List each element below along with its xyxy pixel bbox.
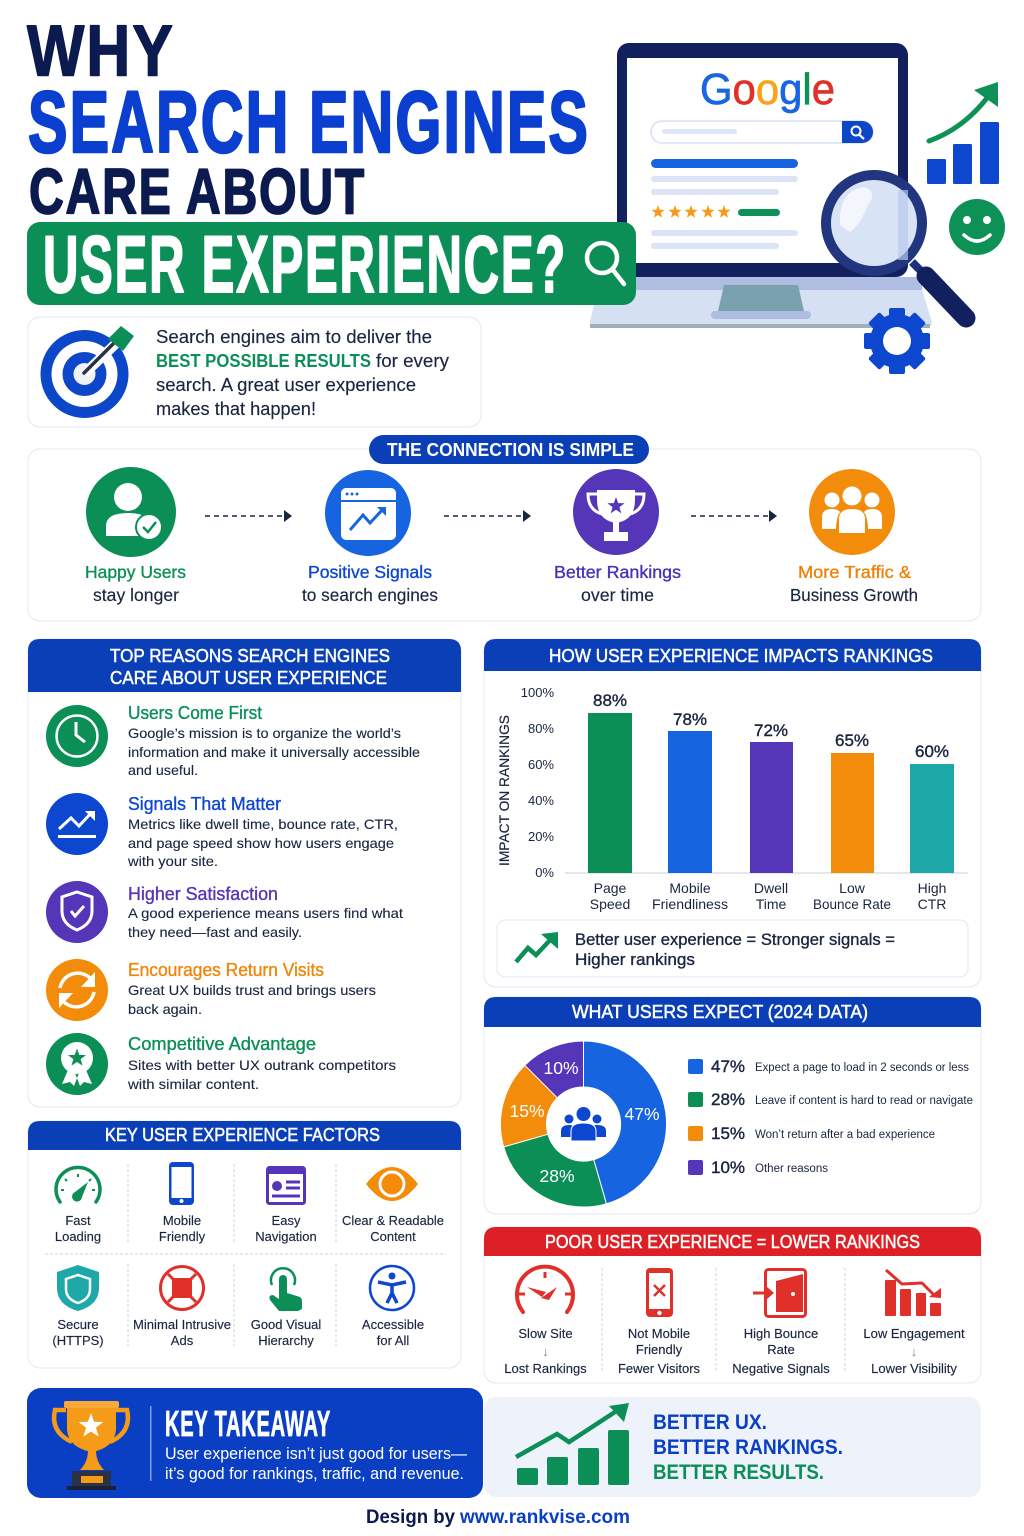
intro panel [28,317,481,427]
item: low engagement [863,1270,965,1376]
legend: Leave if content is hard to read or navigate [755,1095,973,1107]
panel header: KEY USER EXPERIENCE FACTORS [105,1125,380,1145]
legend: 28% [711,1090,745,1109]
legend: 47% [711,1057,745,1076]
smiley [949,199,1005,255]
factor: mobile friendly: Mobile [163,1213,201,1228]
reason: competitive advantage: Competitive Advantage [128,1034,316,1054]
item: not mobile friendly: Friendly [636,1342,683,1357]
item: high bounce rate [732,1270,830,1376]
bar chart: 78% [673,710,707,729]
factor: easy navigation [255,1167,317,1244]
icon: trophy [54,1401,128,1490]
panel header: TOP REASONS SEARCH ENGINES [110,646,390,666]
item: low engagement: ↓ [911,1344,917,1359]
legend: Won’t return after a bad experience [755,1129,935,1141]
arrow [205,510,292,522]
step: better rankings: Better Rankings [554,562,681,582]
donut chart [500,1041,667,1207]
factor: clear content: Clear & Readable [342,1213,444,1228]
takeaway text: it’s good for rankings, traffic, and revenue. [165,1464,464,1483]
takeaway text: User experience isn’t just good for users— [165,1444,467,1463]
bar chart: 100% [521,685,554,700]
legend: 15% [711,1124,745,1143]
pill heading: THE CONNECTION IS SIMPLE [387,440,634,460]
title [27,12,636,310]
item: not mobile friendly: Fewer Visitors [618,1361,701,1376]
title line: search engines: SEARCH ENGINES [28,74,590,171]
step: more traffic: Business Growth [790,585,918,605]
donut chart: 15% [509,1101,545,1121]
reason: return visits: Great UX builds trust and brings users [128,982,376,998]
intro text: Search engines aim to deliver the [156,326,432,347]
reason: return visits: back again. [128,1001,202,1017]
bar chart: 60% [915,742,949,761]
step: better rankings [554,469,681,605]
panel: poor user experience [484,1227,981,1383]
footer credit: Design by [366,1507,455,1528]
factor: fast loading: Fast [65,1213,91,1228]
step: more traffic: More Traffic & [798,562,911,582]
reason: users come first: and useful. [128,762,198,778]
panel header: CARE ABOUT USER EXPERIENCE [110,668,387,688]
panel header [484,639,981,671]
reason: competitive advantage: with similar content. [127,1076,259,1092]
gear [864,308,930,374]
reason: users come first [46,703,420,778]
factor: minimal ads: Ads [171,1333,194,1348]
legend: 10% [711,1158,745,1177]
panel: better results [484,1397,981,1497]
item: high bounce rate: Negative Signals [732,1361,830,1376]
callout [497,920,968,977]
legend: Other reasons [755,1163,828,1175]
item: not mobile friendly [618,1268,701,1376]
step: happy users [85,467,186,605]
callout: Better user experience = Stronger signals = [575,931,895,949]
takeaway heading: KEY TAKEAWAY [165,1403,331,1444]
factor: mobile friendly: Friendly [159,1229,206,1244]
panel: what users expect [484,997,981,1214]
factor: mobile friendly [159,1162,206,1244]
laptop base [590,277,932,328]
step: happy users: Happy Users [85,562,186,582]
factor: accessible: for All [377,1333,409,1348]
bar chart with arrow [927,82,999,184]
icon: growth chart [516,1403,629,1485]
search bar [651,121,873,143]
reason: users come first: information and make it universally accessible [128,744,420,760]
factor: easy navigation: Easy [272,1213,301,1228]
monitor [617,43,908,277]
panel: how user experience impacts rankings [484,639,981,987]
step: happy users: stay longer [93,585,179,605]
reason: competitive advantage: Sites with better UX outrank competitors [128,1057,396,1073]
bar chart [497,685,968,912]
icon: target [40,326,134,418]
factor: fast loading: Loading [55,1229,101,1244]
panel header [28,1121,461,1150]
intro text: search. A great user experience [156,374,416,395]
item: slow site: Lost Rankings [504,1361,587,1376]
reason: return visits: Encourages Return Visits [128,960,324,980]
step: better rankings: over time [581,585,654,605]
bar chart: 80% [528,721,554,736]
panel: key takeaway [27,1388,483,1498]
reason: signals that matter: Signals That Matter [128,794,281,814]
factor: secure [52,1265,104,1348]
Google logo: Google [700,65,835,114]
pill heading [369,435,649,464]
legend [688,1057,973,1177]
slogan [653,1411,843,1484]
factor: accessible: Accessible [362,1317,424,1332]
panel header [484,1227,981,1256]
reason: signals that matter: Metrics like dwell time, bounce rate, CTR, [128,816,398,832]
donut chart: 28% [539,1166,575,1186]
arrow [444,510,531,522]
bar chart: High [918,880,946,896]
title line: why: WHY [27,12,175,92]
title banner [27,220,636,310]
bar chart: 20% [528,829,554,844]
hero illustration: laptop, search, magnifier [590,43,1005,374]
item: slow site: Slow Site [518,1326,573,1341]
item: low engagement: Low Engagement [863,1326,965,1341]
reason: signals that matter: and page speed show how users engage [128,835,394,851]
step: more traffic [790,469,918,605]
reason: higher satisfaction [46,881,403,943]
factor: secure: Secure [57,1317,99,1332]
footer credit [366,1507,630,1528]
bar chart: 88% [593,691,627,710]
item: slow site: ↓ [542,1344,549,1359]
search results [651,159,798,249]
takeaway text [165,1444,467,1483]
slogan: BETTER RANKINGS. [653,1436,843,1459]
donut chart: 10% [543,1058,579,1078]
panel: the connection is simple [28,435,981,621]
bar chart: Time [756,896,787,912]
donut chart: 47% [624,1104,660,1124]
intro text: BEST POSSIBLE RESULTS [156,350,371,371]
bar chart: Speed [590,896,630,912]
slogan: BETTER UX. [653,1411,767,1434]
item: high bounce rate: High Bounce [744,1326,818,1341]
panel header: POOR USER EXPERIENCE = LOWER RANKINGS [545,1232,920,1252]
step: positive signals: Positive Signals [308,562,432,582]
factor: visual hierarchy: Good Visual [251,1317,321,1332]
bar chart: 0% [535,865,554,880]
item: low engagement: Lower Visibility [871,1361,957,1376]
panel: key user experience factors [28,1121,461,1368]
bar chart: Bounce Rate [813,896,891,912]
factor: minimal ads [133,1266,231,1348]
factor: accessible [362,1266,424,1348]
slogan: BETTER RESULTS. [653,1461,824,1484]
bar chart: 72% [754,721,788,740]
legend: Expect a page to load in 2 seconds or less [755,1062,969,1074]
bar chart: 60% [528,757,554,772]
title banner: USER EXPERIENCE? [43,220,567,310]
step: positive signals [302,470,438,605]
reason: higher satisfaction: A good experience means users find what [128,905,403,921]
factor: fast loading [55,1167,101,1244]
reason: competitive advantage [46,1033,396,1095]
title line: care about: CARE ABOUT [29,156,366,228]
item: slow site [504,1267,587,1376]
reason: users come first: Google’s mission is to organize the world’s [128,725,401,741]
bar chart: IMPACT ON RANKINGS [497,715,512,866]
bar chart: Mobile [669,880,711,896]
icon: people [561,1107,606,1141]
panel header: WHAT USERS EXPECT (2024 DATA) [572,1002,868,1022]
bar chart: 40% [528,793,554,808]
intro text: for every [376,350,450,371]
intro text [156,326,450,419]
item: high bounce rate: Rate [767,1342,795,1357]
bar chart: 65% [835,731,869,750]
factor: visual hierarchy [251,1268,321,1348]
bar chart: Low [839,880,866,896]
reason: signals that matter: with your site. [127,853,218,869]
magnifying glass [826,175,966,318]
factor: visual hierarchy: Hierarchy [258,1333,314,1348]
factor: secure: (HTTPS) [52,1333,104,1348]
reason: higher satisfaction: Higher Satisfaction [128,884,278,904]
panel header: HOW USER EXPERIENCE IMPACTS RANKINGS [549,646,933,666]
bar chart: CTR [918,896,946,912]
step: positive signals: to search engines [302,585,438,605]
bar chart: Dwell [754,880,788,896]
arrow [691,510,777,522]
factor: clear content: Content [370,1229,416,1244]
reason: return visits [46,959,376,1021]
footer credit: www.rankvise.com [459,1507,630,1528]
bar chart: Friendliness [652,896,728,912]
factor: clear content [342,1167,444,1244]
factor: minimal ads: Minimal Intrusive [133,1317,231,1332]
reason: higher satisfaction: they need—fast and easily. [128,924,302,940]
intro text: makes that happen! [156,398,316,419]
item: not mobile friendly: Not Mobile [628,1326,690,1341]
factor: easy navigation: Navigation [255,1229,317,1244]
reason: users come first: Users Come First [128,703,262,723]
panel header [28,639,461,692]
panel header [484,997,981,1027]
bar chart: Page [594,880,627,896]
reason: signals that matter [46,793,398,869]
panel: top reasons [28,639,461,1107]
callout: Higher rankings [575,951,695,969]
